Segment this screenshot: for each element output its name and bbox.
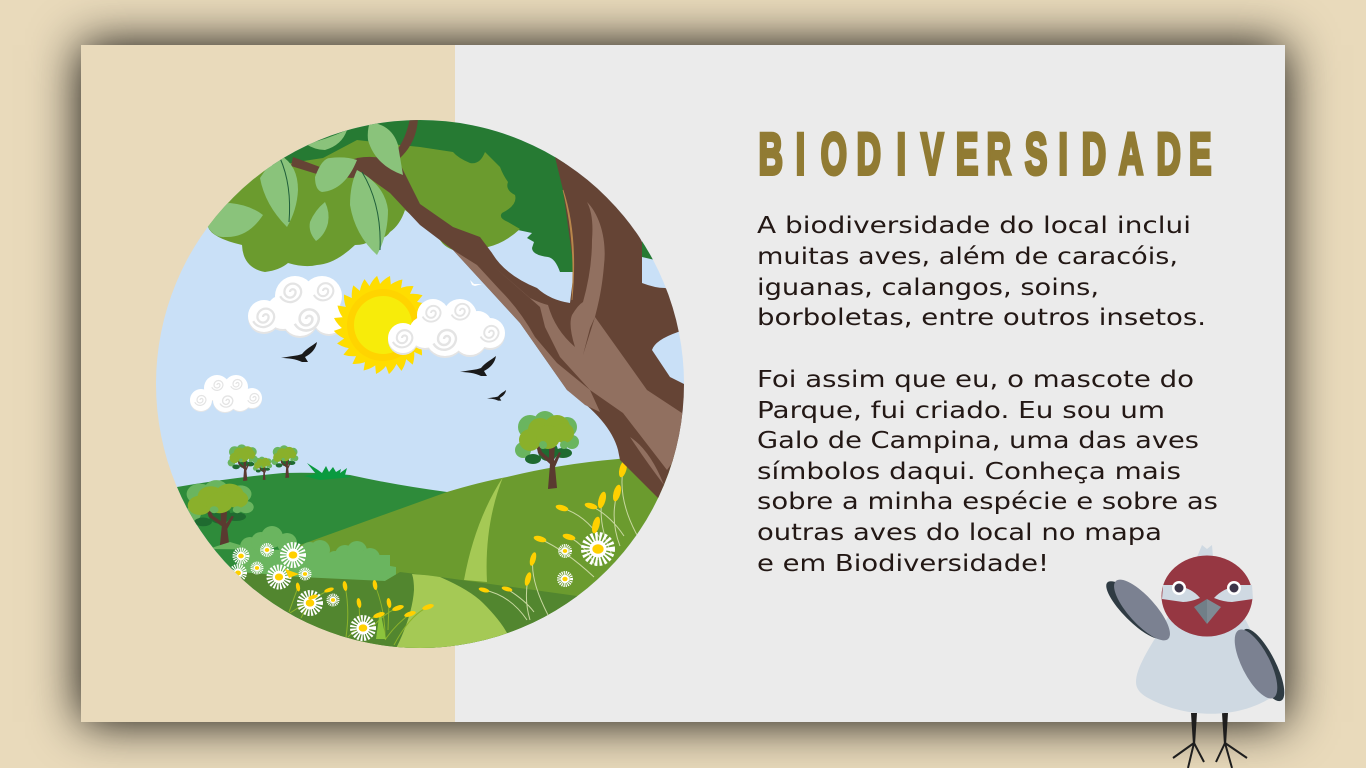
trunk bark edge	[563, 190, 574, 300]
tree trunk and limbs	[291, 118, 700, 520]
shrubs	[208, 526, 396, 581]
back hill	[170, 473, 447, 620]
text block: first paragraph: borboletas, entre outros insetos.	[757, 303, 1206, 331]
cloud: small	[190, 375, 262, 413]
tree on the right hill	[515, 411, 579, 489]
birds in the sky	[281, 280, 506, 401]
circular landscape illustration	[150, 110, 700, 660]
cloud: large left	[248, 276, 345, 338]
grass tuft	[304, 463, 352, 480]
crest	[1197, 545, 1213, 557]
small trees on back hill	[228, 444, 298, 481]
big tree lower left	[183, 480, 254, 548]
small green shoot	[376, 610, 386, 639]
small green foliage at right	[642, 241, 653, 260]
eye stripes	[1162, 585, 1200, 602]
text block: first paragraph: iguanas, calangos, soins,	[757, 273, 1099, 301]
body	[1136, 610, 1272, 714]
trunk shadow sliver	[584, 318, 595, 353]
text block: second paragraph: Parque, fui criado. Eu sou um	[757, 396, 1165, 424]
hill path near	[396, 574, 507, 648]
hill path far	[464, 477, 503, 582]
text block: second paragraph: Galo de Campina, uma das aves	[757, 426, 1199, 454]
mascot: Galo de Campina bird	[1099, 545, 1292, 768]
middle hill	[300, 453, 675, 648]
sun	[334, 276, 432, 374]
text block: second paragraph: outras aves do local no mapa	[757, 518, 1162, 546]
legs	[1173, 713, 1247, 768]
text block: second paragraph: sobre a minha espécie e sobre as	[757, 487, 1218, 515]
illustration and text layer	[156, 120, 1284, 768]
cloud: over sun	[388, 299, 505, 358]
beak	[1194, 599, 1221, 624]
right wing	[1226, 624, 1292, 706]
sky	[150, 110, 690, 655]
trunk highlights	[453, 202, 700, 485]
text block: second paragraph: símbolos daqui. Conheça mais	[757, 457, 1181, 485]
left wing raised	[1099, 572, 1178, 648]
text block: second paragraph: e em Biodiversidade!	[757, 549, 1049, 577]
text block: second paragraph	[757, 365, 1218, 577]
leaves	[208, 122, 403, 255]
text block: first paragraph	[757, 211, 1206, 331]
text block: first paragraph: A biodiversidade do local inclui	[757, 211, 1191, 239]
title: BIODIVERSIDADE	[759, 123, 1211, 187]
eyes	[1172, 581, 1241, 595]
daisies	[234, 540, 606, 634]
panel: slide card	[81, 45, 1285, 722]
text block: second paragraph: Foi assim que eu, o mascote do	[757, 365, 1194, 393]
grass stems	[484, 469, 637, 620]
head	[1162, 556, 1252, 636]
tree crown green foliage	[190, 140, 520, 272]
panel: beige left band	[81, 45, 455, 722]
front hill	[234, 571, 577, 648]
text block: first paragraph: muitas aves, além de caracóis,	[757, 242, 1178, 270]
yellow seed heads	[285, 460, 629, 619]
tree crown dark foliage	[270, 110, 575, 272]
